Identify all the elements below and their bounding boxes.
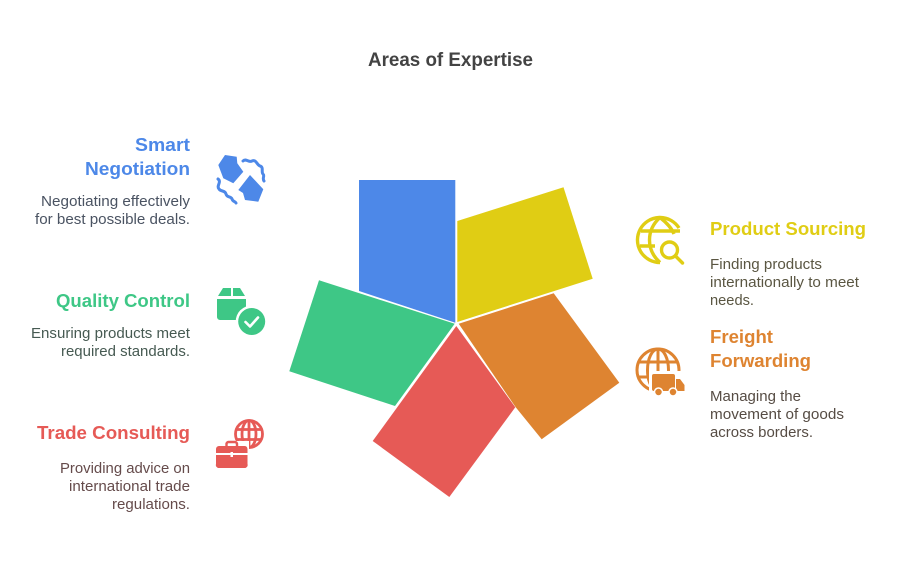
- panel: product sourcing: [710, 218, 866, 309]
- description: [31, 326, 190, 360]
- diagram: five-segment pinwheel: [289, 180, 619, 497]
- title: Areas of Expertise: [368, 50, 533, 71]
- description: regulations.: [112, 497, 190, 513]
- description: [35, 194, 191, 228]
- icon: globe with magnifier: [637, 218, 682, 263]
- description: Ensuring products meet: [31, 326, 190, 342]
- icon: negotiation handshake: [218, 155, 264, 203]
- panel: quality control: [31, 290, 190, 360]
- description: [60, 461, 190, 513]
- segment: orange: [459, 293, 619, 439]
- heading: Forwarding: [710, 350, 811, 371]
- description: across borders.: [710, 425, 813, 441]
- description: Providing advice on: [60, 461, 190, 477]
- description: needs.: [710, 293, 754, 309]
- panel: trade consulting: [37, 422, 190, 513]
- panel: smart negotiation: [35, 134, 191, 228]
- heading: [710, 326, 811, 371]
- description: [710, 257, 859, 309]
- description: movement of goods: [710, 407, 844, 423]
- heading: [85, 134, 191, 179]
- icon: globe with truck: [637, 349, 687, 397]
- description: international trade: [69, 479, 190, 495]
- heading: Freight: [710, 326, 774, 347]
- heading: Trade Consulting: [37, 422, 190, 443]
- description: Negotiating effectively: [41, 194, 191, 210]
- description: Managing the: [710, 389, 801, 405]
- description: Finding products: [710, 257, 822, 273]
- description: for best possible deals.: [35, 212, 190, 228]
- heading: Smart: [135, 134, 191, 155]
- segment: yellow: [457, 187, 593, 322]
- description: [710, 389, 844, 441]
- heading: Product Sourcing: [710, 218, 866, 239]
- icon: box with check: [217, 288, 268, 338]
- segment: red: [373, 326, 515, 497]
- panel: freight forwarding: [710, 326, 844, 441]
- description: internationally to meet: [710, 275, 859, 291]
- heading: Negotiation: [85, 158, 190, 179]
- icon: globe and briefcase: [214, 420, 262, 469]
- segment: green: [289, 280, 455, 406]
- description: required standards.: [61, 344, 190, 360]
- segment: blue: [359, 180, 455, 323]
- heading: Quality Control: [56, 290, 190, 311]
